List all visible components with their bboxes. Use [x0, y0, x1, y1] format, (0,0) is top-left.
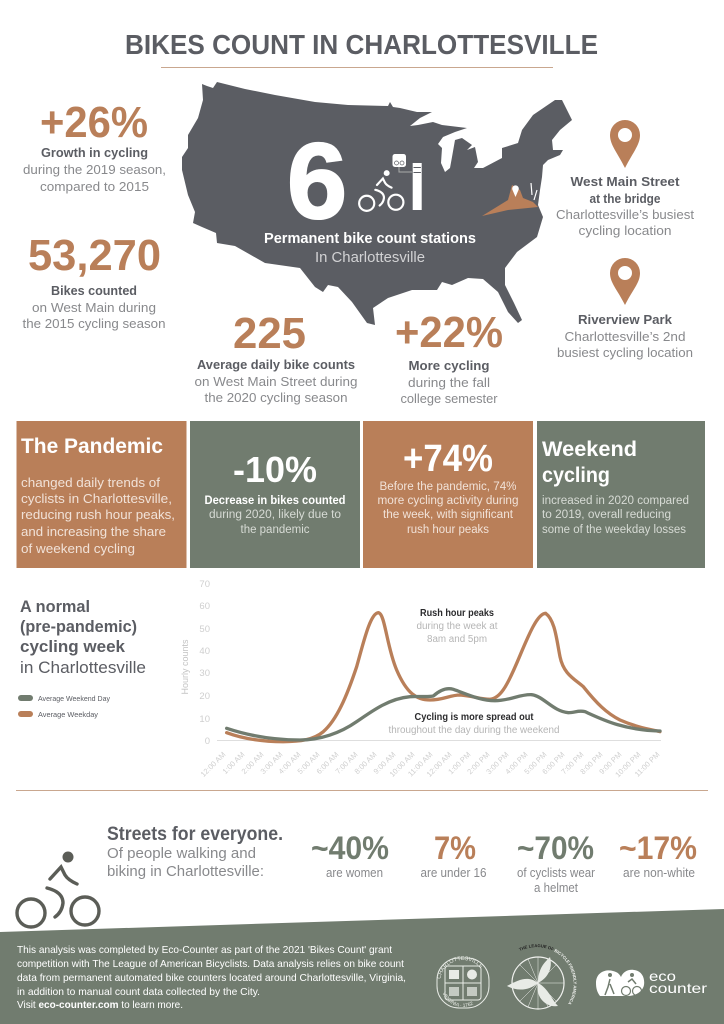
panel: before the pandemic: Before the pandemic, 74%: [380, 481, 516, 493]
chart annotation: weekend spread: throughout the day during the weekend: [388, 724, 560, 736]
panel: decrease: -10%: [233, 449, 317, 490]
chart heading: (pre-pandemic): [20, 617, 137, 636]
logo: League of American Bicyclists: THE LEAGUE OF BICYCLE FRIENDLY AMERICA: [518, 944, 577, 1004]
location: Riverview Park: Charlottesville’s 2nd: [564, 329, 686, 344]
heading: streets for everyone: Of people walking and: [107, 845, 256, 862]
stat: non-white: ~17%: [619, 830, 697, 866]
logo: eco counter: eco: [649, 968, 676, 984]
location: West Main Street: Charlottesville’s busiest: [556, 207, 694, 222]
panel: the pandemic: cyclists in Charlottesville,: [21, 491, 172, 506]
panel: decrease: during 2020, likely due to: [209, 509, 341, 521]
chart annotation: rush hour peaks: 8am and 5pm: [427, 634, 487, 645]
line chart: hourly counts: 70: [199, 579, 210, 590]
logo: city of Charlottesville seal: CHARLOTTESVILLE: [438, 956, 483, 978]
line chart: hourly counts: 2:00 AM: [240, 750, 265, 776]
chart annotation: weekend spread: [388, 711, 560, 736]
line chart: hourly counts: 0: [205, 736, 210, 747]
heading: streets for everyone: [107, 824, 283, 880]
panel: before the pandemic: +74%: [403, 438, 493, 480]
panel: decrease: the pandemic: [240, 524, 310, 536]
stat: fall semester: More cycling: [408, 358, 490, 373]
chart legend: Average Weekend Day: [38, 694, 110, 703]
heading: streets for everyone: biking in Charlottesville:: [107, 863, 264, 880]
Virginia highlight: [482, 183, 538, 216]
map label: In Charlottesville: [315, 249, 425, 266]
icon: map pin: [610, 258, 640, 305]
chart heading: A normal: [20, 597, 90, 616]
logo: eco counter: counter: [649, 980, 707, 996]
stat: growth in cycling: compared to 2015: [40, 179, 149, 194]
stat: average daily counts: [194, 309, 358, 405]
chart heading: cycling week: [20, 637, 126, 656]
panel: decrease: Decrease in bikes counted: [204, 493, 346, 507]
panel: decrease: [190, 421, 360, 568]
stat: average daily counts: the 2020 cycling season: [204, 390, 348, 405]
chart legend: [18, 694, 110, 719]
map of the United States: [182, 82, 572, 325]
heading: streets for everyone: Streets for everyone.: [107, 824, 283, 845]
footer text: competition with The League of American Bicyclists. Data analysis relies on bike count: [17, 959, 404, 970]
panel: the pandemic: [16, 421, 186, 568]
line chart: hourly counts: 5:00 PM: [522, 750, 548, 776]
line chart: hourly counts: 30: [199, 668, 210, 679]
line chart: hourly counts: 8:00 AM: [353, 750, 378, 776]
location: West Main Street: cycling location: [578, 223, 672, 238]
stat: growth in cycling: Growth in cycling: [41, 145, 148, 160]
stat: growth in cycling: +26%: [40, 98, 148, 147]
line chart: hourly counts: 6:00 AM: [315, 750, 340, 776]
line chart: hourly counts: 1:00 AM: [221, 750, 246, 776]
location: Riverview Park: [557, 258, 693, 360]
line chart: hourly counts: 11:00 PM: [633, 750, 661, 779]
line chart: hourly counts: 10: [199, 714, 210, 725]
stat: women: [311, 830, 389, 880]
stat: women: are women: [326, 866, 383, 880]
line chart: hourly counts: 5:00 AM: [296, 750, 321, 776]
stat: bikes counted: Bikes counted: [51, 283, 137, 298]
line chart: hourly counts: 4:00 AM: [277, 750, 302, 776]
stat: bikes counted: the 2015 cycling season: [22, 316, 166, 331]
chart annotation: rush hour peaks: [416, 608, 498, 645]
chart heading: [20, 597, 146, 677]
location: West Main Street: [556, 120, 694, 238]
panel: weekend cycling: some of the weekday losses: [542, 524, 686, 536]
line chart: hourly counts: [180, 579, 661, 779]
panel: the pandemic: of weekend cycling: [21, 541, 135, 556]
chart legend: Average Weekday: [38, 710, 98, 719]
icon: cyclist: [17, 852, 99, 927]
stat: average daily counts: 225: [233, 309, 306, 358]
stat: helmet: ~70%: [517, 830, 594, 866]
stat: under 16: 7%: [434, 830, 476, 866]
panel: before the pandemic: more cycling activity during: [378, 495, 518, 507]
stat: bikes counted: [22, 231, 166, 331]
panel: weekend cycling: to 2019, overall reducing: [542, 509, 671, 521]
chart annotation: weekend spread: Cycling is more spread out: [414, 711, 534, 723]
line chart: hourly counts: 12:00 AM: [199, 750, 227, 779]
line chart: hourly counts: 8:00 PM: [578, 750, 604, 776]
panel: the pandemic: reducing rush hour peaks,: [21, 507, 175, 522]
icon: counter station: [392, 154, 422, 210]
line chart: hourly counts: 60: [199, 601, 210, 612]
panel: weekend cycling: cycling: [542, 464, 610, 487]
footer text: in addition to manual count data collected by the City.: [17, 987, 260, 998]
big number 6: 6: [287, 120, 347, 241]
panel: the pandemic: changed daily trends of: [21, 475, 160, 490]
map label: Permanent bike count stations: [264, 230, 476, 247]
stat: bikes counted: 53,270: [28, 231, 161, 280]
logo: eco counter: [596, 968, 707, 996]
location: Riverview Park: busiest cycling location: [557, 345, 693, 360]
footer text: [17, 945, 406, 1011]
location: West Main Street: at the bridge: [590, 191, 660, 206]
line chart: hourly counts: 7:00 AM: [334, 750, 359, 776]
panel: the pandemic: The Pandemic: [21, 435, 163, 458]
stat: fall semester: college semester: [400, 391, 498, 406]
map label: [264, 230, 476, 266]
line chart: hourly counts: 50: [199, 624, 210, 635]
stat: fall semester: during the fall: [408, 375, 490, 390]
line chart: hourly counts: 9:00 AM: [372, 750, 397, 776]
chart annotation: rush hour peaks: Rush hour peaks: [420, 608, 494, 619]
stat: under 16: are under 16: [420, 866, 487, 880]
line chart: hourly counts: 9:00 PM: [597, 750, 623, 776]
line chart: hourly counts: 3:00 PM: [484, 750, 510, 776]
stat: women: ~40%: [311, 830, 389, 866]
line chart: hourly counts: 10:00 PM: [613, 750, 642, 779]
stat: helmet: of cyclists wear: [517, 866, 595, 880]
stat: bikes counted: on West Main during: [32, 300, 156, 315]
logo: city of Charlottesville seal: [436, 956, 490, 1008]
line chart: hourly counts: 11:00 AM: [406, 750, 434, 778]
line chart: hourly counts: 2:00 PM: [465, 750, 491, 776]
stat: non-white: [619, 830, 697, 880]
stat: growth in cycling: [23, 98, 166, 194]
line chart: hourly counts: 7:00 PM: [559, 750, 585, 776]
line chart: hourly counts: 10:00 AM: [388, 750, 416, 779]
stat: under 16: [420, 830, 487, 880]
chart annotation: rush hour peaks: during the week at: [416, 621, 498, 632]
icon: map pin: [610, 120, 640, 168]
stat: helmet: a helmet: [534, 881, 578, 895]
chart heading: in Charlottesville: [20, 658, 146, 677]
footer band: [0, 909, 724, 1024]
stat: non-white: are non-white: [623, 866, 695, 880]
location: West Main Street: West Main Street: [570, 174, 680, 189]
title: BIKES COUNT IN CHARLOTTESVILLE: [125, 29, 598, 60]
panel: before the pandemic: the week, with significant: [383, 509, 514, 521]
logo: city of Charlottesville seal: VIRGINIA · 1762: [443, 992, 474, 1007]
line chart: hourly counts: 6:00 PM: [540, 750, 566, 776]
panel: before the pandemic: [363, 421, 533, 568]
panel: weekend cycling: [537, 421, 705, 568]
stat: growth in cycling: during the 2019 season,: [23, 162, 166, 177]
panel: before the pandemic: rush hour peaks: [407, 524, 489, 536]
footer text: Visit eco-counter.com to learn more.: [17, 1000, 183, 1011]
stat: average daily counts: on West Main Street during: [194, 374, 358, 389]
footer text: This analysis was completed by Eco-Counter as part of the 2021 'Bikes Count' grant: [17, 945, 392, 956]
line chart: hourly counts: 12:00 AM: [425, 750, 453, 779]
icon: cyclist: [359, 170, 403, 211]
line chart: hourly counts: 4:00 PM: [503, 750, 529, 776]
panel: weekend cycling: increased in 2020 compared: [542, 495, 689, 507]
line chart: hourly counts: 3:00 AM: [259, 750, 284, 776]
panel: weekend cycling: Weekend: [542, 438, 637, 461]
location: Riverview Park: Riverview Park: [578, 312, 673, 327]
line chart: hourly counts: 20: [199, 691, 210, 702]
panel: the pandemic: and increasing the share: [21, 524, 166, 539]
line chart: hourly counts: 40: [199, 646, 210, 657]
footer text: data from permanent automated bike counters located around Charlottesville, Virginia,: [17, 973, 406, 984]
stat: average daily counts: Average daily bike counts: [197, 357, 355, 372]
line chart: hourly counts: 1:00 PM: [446, 750, 472, 776]
stat: fall semester: +22%: [395, 308, 503, 357]
line chart: hourly counts: Hourly counts: [180, 639, 190, 695]
stat: helmet: [517, 830, 595, 895]
stat: fall semester: [395, 308, 503, 406]
